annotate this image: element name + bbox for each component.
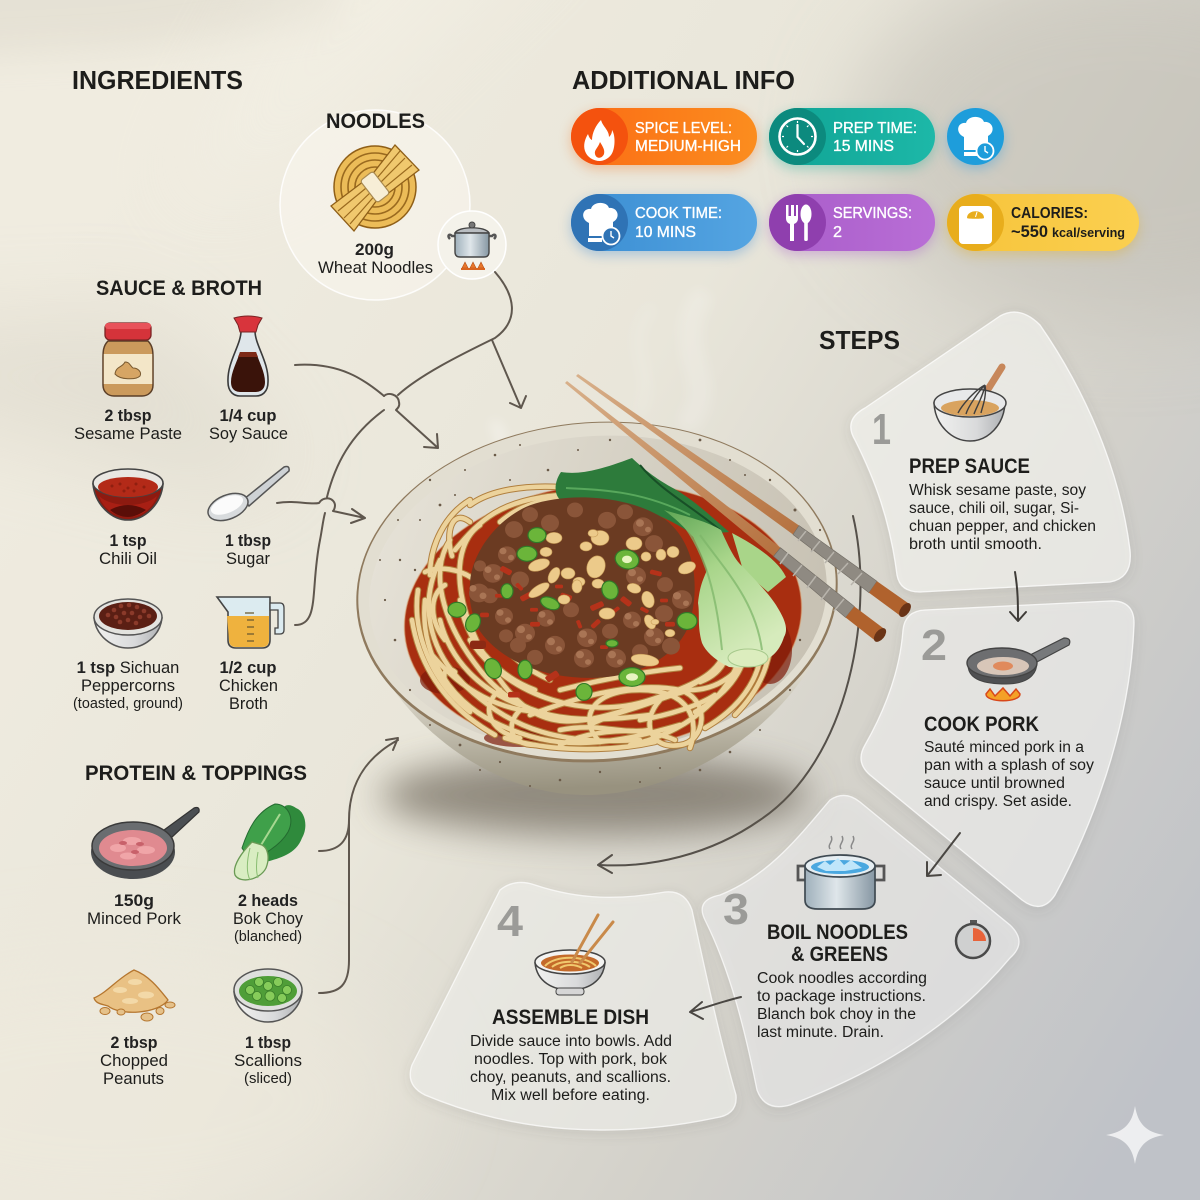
text: cook pork instructions: [924, 739, 1094, 810]
ingredient: soy sauce: [209, 316, 288, 443]
ingredient: chicken broth: Broth: [229, 695, 268, 713]
ingredient: chopped peanuts: [94, 970, 175, 1088]
text: prep sauce instructions: broth until smooth.: [909, 536, 1042, 553]
ingredient: chopped peanuts: 2 tbsp: [110, 1034, 158, 1052]
pill: calories: CALORIES:: [1011, 205, 1088, 222]
text: assemble dish instructions: noodles. Top with pork, bok: [474, 1051, 667, 1068]
heading: assemble dish: ASSEMBLE DISH: [492, 1006, 649, 1029]
step number 1: 1: [872, 405, 891, 454]
label: wheat noodles: 200g: [355, 240, 394, 259]
text: cook pork instructions: sauce until browned: [924, 775, 1065, 792]
pill: spice level: [571, 108, 757, 165]
icon: noodle bowl with chopsticks: [535, 915, 613, 995]
panel: step 4 assemble dish: [410, 882, 736, 1130]
icon: noodle bundle: [331, 145, 419, 231]
ingredient: sugar: 1 tbsp: [225, 532, 271, 550]
text: cook pork instructions: Sauté minced pork in a: [924, 739, 1084, 756]
arrow: step 3 to step 4 curve around bowl: [598, 516, 861, 873]
bok choy: [556, 458, 786, 667]
heading: sauce and broth: SAUCE & BROTH: [96, 276, 262, 300]
pill: cook time: 10 MINS: [635, 224, 696, 241]
ingredient: chicken broth: 1/2 cup: [220, 659, 276, 677]
pill: prep time: [769, 108, 935, 165]
ingredient: sichuan peppercorns: [73, 599, 183, 712]
panel: step 3 boil noodles and greens: [702, 795, 1019, 1107]
arrow: step 1 to step 2: [1010, 572, 1026, 621]
ingredient: soy sauce: Soy Sauce: [209, 425, 288, 443]
pills: additional info: [571, 108, 1139, 251]
illustration: chopsticks: [565, 374, 913, 644]
ingredient: chicken broth: Chicken: [219, 677, 278, 695]
icon: timer: [956, 920, 990, 958]
heading: prep sauce: PREP SAUCE: [909, 455, 1030, 478]
panel: step 1 prep sauce: [851, 312, 1130, 592]
ingredient: chili oil: Chili Oil: [99, 550, 157, 568]
ingredient: chili oil: 1 tsp: [110, 532, 146, 550]
pill: cook time: [571, 194, 757, 251]
icon: boiling pot: [798, 836, 884, 909]
icon: sparkle watermark: [1106, 1106, 1164, 1164]
ingredient: scallions: (sliced): [244, 1071, 292, 1087]
step number 3: 3: [723, 885, 749, 934]
arrow: step 2 to step 3: [927, 833, 960, 876]
panel: noodles: [280, 109, 470, 300]
pill: calories: ~550: [1011, 223, 1048, 241]
ingredient: bok choy: 2 heads: [238, 892, 298, 910]
pill: servings: 2: [833, 224, 842, 241]
step number 4: 4: [497, 897, 524, 946]
illustration: dan dan noodle bowl: [345, 406, 849, 795]
text: boil noodles instructions: last minute. Drain.: [757, 1024, 884, 1041]
heading: boil noodles and greens: [767, 921, 908, 966]
pill: spice level: SPICE LEVEL:: [635, 120, 732, 137]
step number 2: 2: [921, 621, 947, 670]
ingredient: bok choy: [233, 804, 305, 945]
text: boil noodles instructions: to package instructions.: [757, 988, 926, 1005]
pill: servings: SERVINGS:: [833, 205, 912, 222]
text: prep sauce instructions: chuan pepper, and chicken: [909, 518, 1096, 535]
text: assemble dish instructions: Divide sauce into bowls. Add: [470, 1033, 672, 1050]
ingredient: sichuan peppercorns: 1 tsp Sichuan: [77, 659, 179, 677]
text: cook pork instructions: and crispy. Set aside.: [924, 793, 1072, 810]
steam: [494, 300, 700, 490]
text: assemble dish instructions: Mix well before eating.: [491, 1087, 650, 1104]
text: prep sauce instructions: [909, 482, 1096, 553]
text: prep sauce instructions: Whisk sesame paste, soy: [909, 482, 1086, 499]
ingredient: sesame paste: 2 tbsp: [104, 407, 152, 425]
ingredient: minced pork: [87, 808, 199, 928]
ingredient: scallions: Scallions: [234, 1052, 302, 1070]
text: boil noodles instructions: [757, 970, 927, 1041]
pill: prep time: 15 MINS: [833, 138, 894, 155]
text: assemble dish instructions: [470, 1033, 672, 1104]
ingredient: bok choy: Bok Choy: [233, 910, 304, 928]
pill: servings: [769, 194, 935, 251]
label: wheat noodles: [318, 240, 433, 277]
ingredient: sesame paste: Sesame Paste: [74, 425, 182, 443]
ingredient: scallions: [234, 969, 302, 1087]
icon: whisk and bowl: [934, 367, 1006, 441]
ingredient: sichuan peppercorns: (toasted, ground): [73, 696, 183, 712]
text: assemble dish instructions: choy, peanuts, and scallions.: [470, 1069, 671, 1086]
title: additional info: ADDITIONAL INFO: [572, 67, 795, 95]
title: ingredients: INGREDIENTS: [72, 67, 243, 95]
ingredient: sugar: Sugar: [226, 550, 271, 568]
label: wheat noodles: Wheat Noodles: [318, 258, 433, 277]
text: cook pork instructions: pan with a splash of soy: [924, 757, 1094, 774]
arrows: ingredient connectors: [277, 272, 526, 993]
icon: frying pan on flame: [967, 638, 1070, 701]
ingredient: soy sauce: 1/4 cup: [220, 407, 276, 425]
ingredient: sesame paste: [74, 323, 182, 443]
heading: cook pork: COOK PORK: [924, 713, 1039, 736]
ingredient: scallions: 1 tbsp: [245, 1034, 291, 1052]
pill: calories: [947, 194, 1139, 251]
heading: noodles: NOODLES: [326, 109, 425, 133]
heading: protein and toppings: PROTEIN & TOPPINGS: [85, 761, 307, 785]
heading: steps: STEPS: [819, 327, 900, 355]
ingredient: chicken broth: [217, 597, 284, 713]
heading: boil noodles and greens: BOIL NOODLES: [767, 921, 908, 944]
ingredient: minced pork: Minced Pork: [87, 910, 182, 928]
ingredient: minced pork: 150g: [114, 892, 154, 910]
ground pork mound: [448, 497, 698, 700]
arrow: step 3 to step 4: [690, 997, 741, 1019]
ingredient: chopped peanuts: Peanuts: [103, 1070, 164, 1088]
bowl shadow: [380, 755, 810, 835]
ingredient: chopped peanuts: Chopped: [100, 1052, 168, 1070]
pill: cook time: COOK TIME:: [635, 205, 722, 222]
ingredient: bok choy: (blanched): [234, 929, 302, 945]
ingredient: sugar: [204, 466, 289, 568]
panel: step 2 cook pork: [861, 601, 1134, 906]
ingredient: chili oil: [93, 469, 163, 568]
text: boil noodles instructions: Cook noodles according: [757, 970, 927, 987]
ingredient: sichuan peppercorns: Peppercorns: [81, 677, 175, 695]
icon: chef hat badge: [947, 108, 1004, 165]
text: boil noodles instructions: Blanch bok choy in the: [757, 1006, 916, 1023]
icon: pot on burner: [438, 211, 506, 279]
pill: calories: kcal/serving: [1052, 225, 1125, 240]
pill: spice level: MEDIUM-HIGH: [635, 138, 741, 155]
pill: prep time: PREP TIME:: [833, 120, 917, 137]
heading: boil noodles and greens: & GREENS: [791, 943, 888, 966]
text: prep sauce instructions: sauce, chili oil, sugar, Si-: [909, 500, 1079, 517]
